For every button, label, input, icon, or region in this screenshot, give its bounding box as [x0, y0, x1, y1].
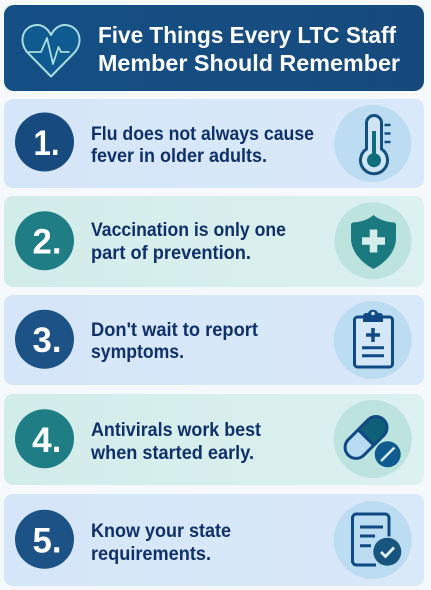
number 3: 3.: [32, 321, 62, 360]
number 1: [15, 112, 74, 172]
number 3: [15, 310, 74, 369]
text: item 2: Vaccination is only one: [91, 220, 286, 241]
number 4: 4.: [32, 421, 62, 460]
header banner: [4, 5, 424, 91]
text: item 3: [91, 320, 259, 363]
icon: capsule and tablet: [334, 400, 412, 478]
text: item 2: [91, 220, 286, 264]
number 1: 1.: [34, 124, 60, 163]
title: Five Things Every LTC Staff: [98, 22, 396, 48]
text: item 4: [90, 420, 262, 464]
text: item 1: [91, 124, 314, 167]
title: [98, 22, 400, 76]
icon: clipboard: [334, 301, 412, 379]
icon: heart with pulse: [22, 25, 80, 77]
panel: item 1: [4, 99, 424, 188]
text: item 2: part of prevention.: [91, 243, 251, 264]
text: item 5: [91, 521, 231, 565]
title: Member Should Remember: [98, 50, 400, 76]
icon: document with check: [334, 501, 412, 579]
icon: thermometer: [334, 105, 411, 182]
text: item 3: Don't wait to report: [91, 320, 259, 341]
text: item 1: Flu does not always cause: [91, 124, 314, 145]
number 2: [15, 211, 74, 270]
number 2: 2.: [32, 222, 62, 262]
number 4: [15, 409, 74, 468]
panel: item 2: [4, 196, 424, 287]
number 5: 5.: [32, 522, 62, 560]
text: item 1: fever in older adults.: [91, 146, 267, 167]
panel: item 4: [4, 394, 424, 485]
text: item 5: requirements.: [91, 544, 211, 565]
panel: item 3: [4, 295, 424, 385]
icon: shield with cross: [334, 202, 412, 279]
number 5: [15, 510, 74, 569]
text: item 4: Antivirals work best: [91, 420, 262, 441]
text: item 5: Know your state: [91, 521, 231, 542]
text: item 3: symptoms.: [91, 342, 184, 363]
panel: item 5: [4, 494, 424, 586]
text: item 4: when started early.: [90, 443, 254, 464]
